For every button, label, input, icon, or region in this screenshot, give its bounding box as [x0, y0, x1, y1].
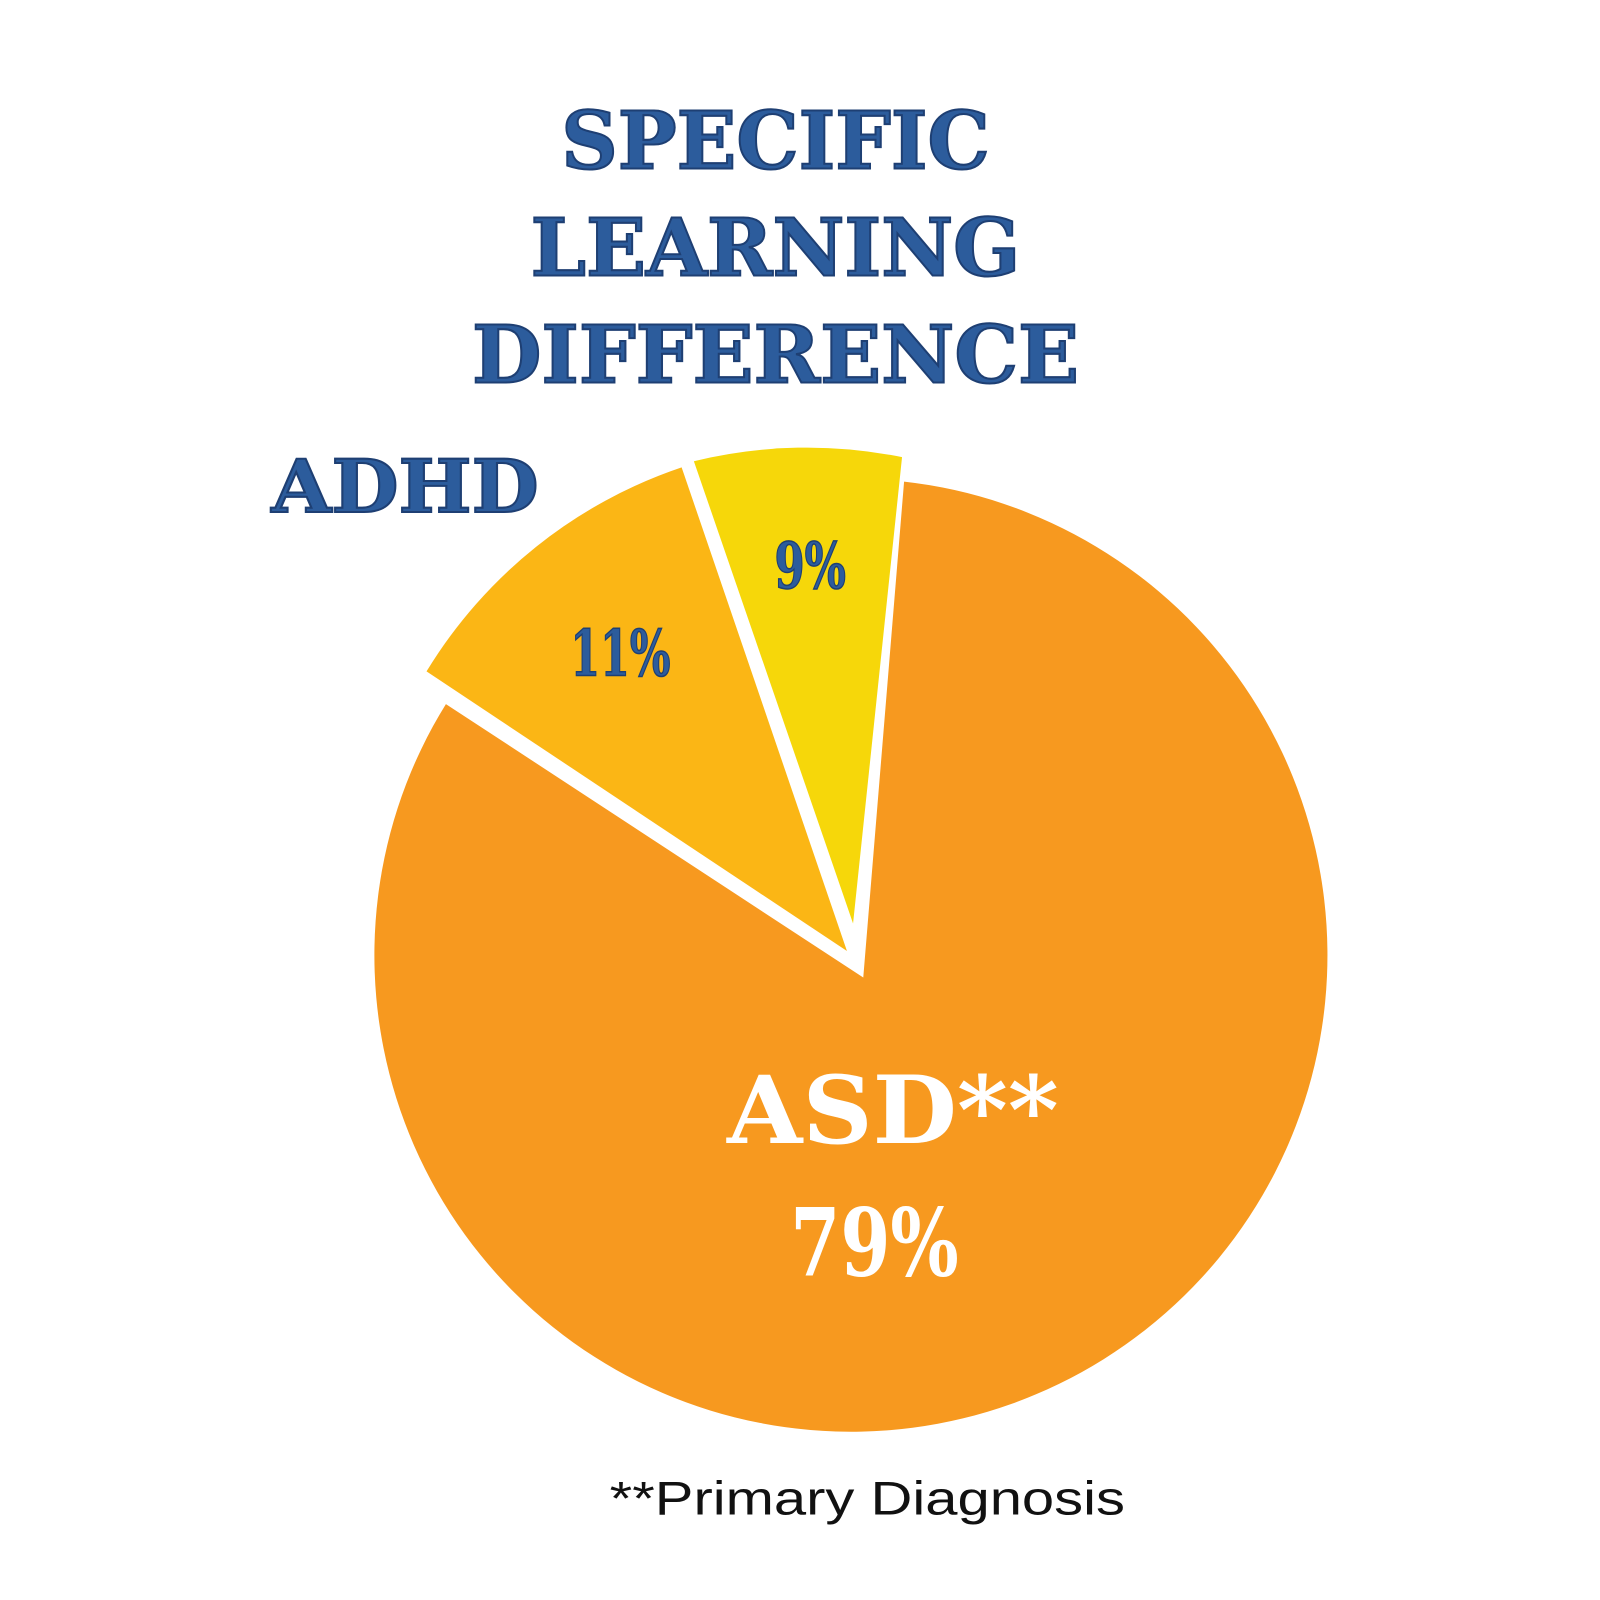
slice: SLD 9% — [694, 448, 902, 923]
title: DIFFERENCE — [472, 308, 1079, 402]
slice: ASD 79% — [374, 482, 1327, 1432]
label: ASD 79%: 79% — [790, 1189, 959, 1299]
label: 9%: 9% — [774, 529, 846, 603]
label: ASD 79% — [726, 1056, 1059, 1299]
title: SPECIFIC — [561, 93, 990, 187]
pie chart — [374, 448, 1327, 1432]
label: ASD 79%: ASD** — [726, 1056, 1059, 1166]
label: 11%: 11% — [570, 617, 670, 691]
title: LEARNING — [531, 201, 1020, 295]
footnote: **Primary Diagnosis — [610, 1472, 1125, 1524]
ADHD label: ADHD — [270, 444, 539, 530]
slice: ADHD 11% — [427, 467, 847, 951]
title — [472, 93, 1079, 402]
